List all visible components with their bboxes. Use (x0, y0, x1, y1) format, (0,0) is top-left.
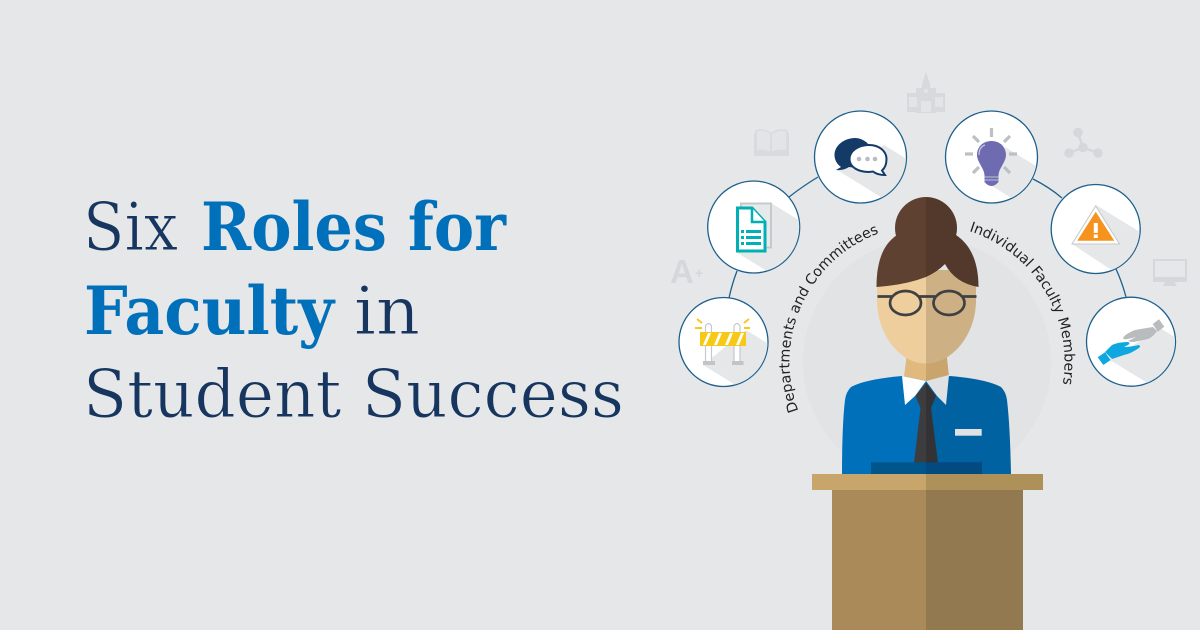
title (83, 188, 624, 433)
podium (812, 474, 1043, 630)
title: Six (83, 189, 178, 266)
ghost icon: university building (907, 72, 945, 113)
role circle: barricade (678, 296, 769, 388)
podium top (812, 474, 926, 490)
curved label: Departments and Committees: Departments and Committees (779, 226, 878, 413)
title: Student Success (83, 356, 624, 433)
role circle: helping hands (1086, 296, 1176, 387)
ghost icon: book (754, 130, 789, 156)
tie (914, 383, 938, 463)
title: Roles for (201, 188, 507, 266)
connector lines (729, 177, 1126, 298)
collar (902, 375, 949, 405)
ghost icon: A+: A (670, 253, 694, 290)
ghost icon: A+: + (695, 265, 703, 281)
role circle: warning triangle (1050, 184, 1141, 274)
neck (904, 355, 949, 381)
role circle: document checklist (707, 180, 800, 274)
title: in (354, 273, 420, 350)
role circle: chat bubbles (814, 110, 908, 204)
hair (876, 197, 978, 287)
backdrop circle behind presenter (803, 238, 1051, 486)
face (877, 270, 976, 364)
book on podium (871, 462, 982, 474)
ghost icon: monitor (1153, 260, 1187, 286)
jacket (842, 376, 1011, 474)
role circle: light bulb (944, 110, 1038, 204)
podium body (832, 490, 926, 630)
ghost icon: molecule (1065, 128, 1102, 157)
curved label: Individual Faculty Members: Individual Faculty Members (970, 222, 1076, 384)
glasses (878, 291, 976, 315)
name tag (955, 429, 982, 436)
presenter figure (842, 197, 1011, 474)
title: Faculty (84, 272, 336, 350)
